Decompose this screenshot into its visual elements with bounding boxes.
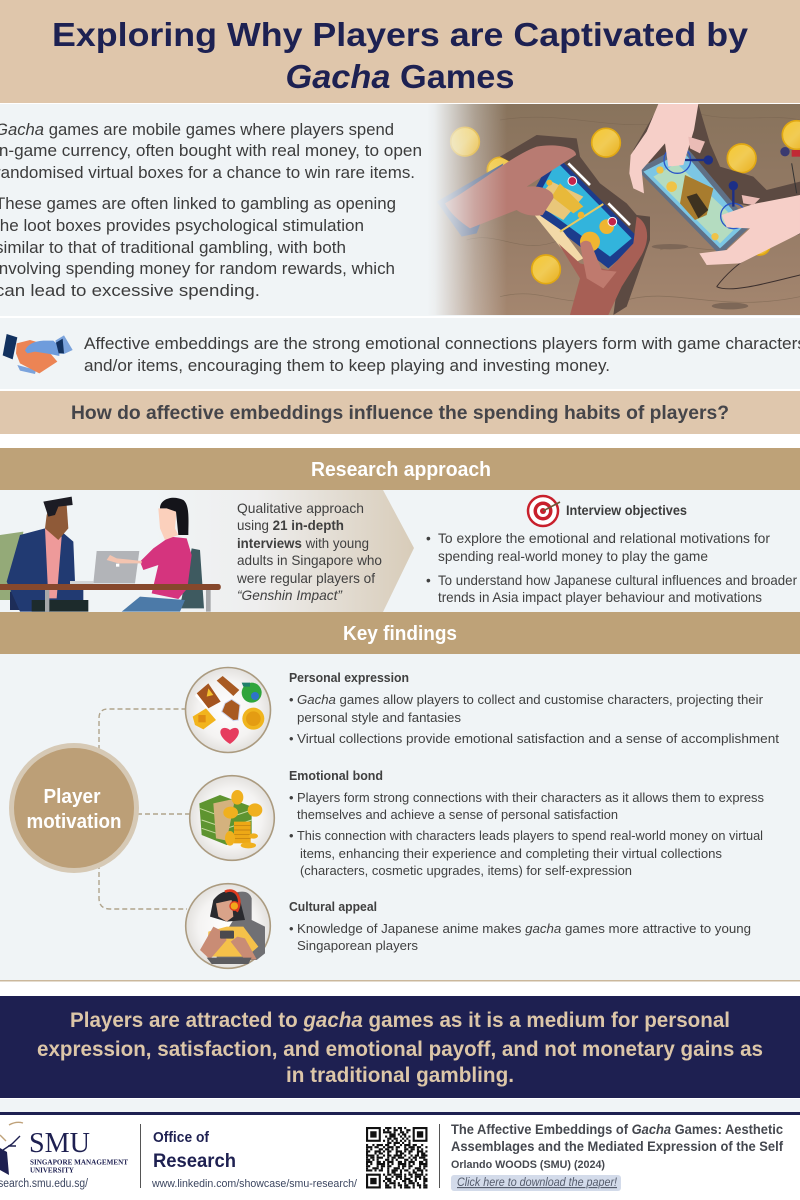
text block: definition: and/or items, encouraging them to keep playing and investing money. — [84, 356, 610, 375]
text block: what gacha games are — [0, 120, 422, 300]
text block: what gacha games are: the loot boxes provides psychological stimulation — [0, 216, 364, 235]
conclusion callout: expression, satisfaction, and emotional payoff, and not monetary gains as — [37, 1037, 763, 1061]
text block: emotional bond: • — [289, 790, 294, 805]
icon: collectibles — [186, 668, 270, 752]
conclusion callout — [0, 996, 800, 1098]
text block: what gacha games are: similar to that of traditional gambling, with both — [0, 238, 346, 257]
text block: objectives: To explore the emotional and relational motivations for — [438, 531, 770, 546]
left phone — [437, 163, 503, 237]
text block: emotional bond: Players form strong connections with their characters as it allows them to express — [297, 790, 764, 805]
text block: emotional bond: • — [289, 828, 294, 843]
player motivation circle — [9, 743, 139, 873]
text block: personal expression: Gacha games allow players to collect and customise characters, projecting their — [297, 692, 764, 707]
illustration: interview at a table — [0, 497, 221, 612]
heading: research approach: Research approach — [311, 459, 491, 481]
title: Exploring Why Players are Captivated by — [52, 17, 748, 54]
paper citation: Orlando WOODS (SMU) (2024) — [451, 1159, 605, 1171]
title — [0, 0, 800, 103]
panel: introduction — [0, 104, 800, 316]
arrow: approach callout — [150, 490, 414, 612]
text block: cultural appeal: Singaporean players — [297, 938, 418, 953]
text block: cultural appeal: • — [289, 921, 294, 936]
text block: qualitative approach: adults in Singapore who — [237, 553, 382, 568]
text block: what gacha games are: These games are often linked to gambling as opening — [0, 194, 396, 213]
text block: qualitative approach: were regular players of — [236, 571, 375, 586]
footer — [0, 1099, 800, 1191]
text block: objectives: trends in Asia impact player behaviour and motivations — [438, 590, 762, 605]
text block: objectives: To understand how Japanese cultural influences and broader — [438, 573, 797, 588]
shadows — [500, 135, 650, 315]
office of research — [153, 1130, 236, 1172]
paper citation — [451, 1122, 783, 1171]
text block: emotional bond: themselves and achieve a sense of personal satisfaction — [297, 807, 618, 822]
text block: qualitative approach: interviews with young — [237, 536, 369, 551]
text block: qualitative approach: “Genshin Impact” — [237, 588, 343, 603]
text block: personal expression: • — [289, 692, 294, 707]
office of research: Office of — [153, 1130, 209, 1146]
download button: Click here to download the paper! — [457, 1177, 618, 1189]
icon: gamer girl — [186, 884, 270, 968]
heading: key findings — [0, 612, 800, 654]
text block: personal expression: personal style and fantasies — [297, 710, 461, 725]
text block: cultural appeal — [289, 899, 751, 953]
heading: research question: How do affective embeddings influence the spending habits of players? — [71, 402, 729, 424]
text block: what gacha games are: can lead to excessive spending. — [0, 281, 260, 300]
panel: affective embeddings definition — [0, 318, 800, 389]
text block: emotional bond: Emotional bond — [289, 768, 383, 783]
SMU logo — [0, 1122, 128, 1175]
text block: what gacha games are: randomised virtual boxes for a chance to win rare items. — [0, 163, 415, 182]
text block: definition: Affective embeddings are the strong emotional connections players form with game characters — [84, 334, 800, 353]
text block: objectives: spending real-world money to play the game — [438, 549, 708, 564]
text block: emotional bond — [289, 768, 764, 878]
SMU logo: UNIVERSITY — [30, 1166, 75, 1174]
text block: emotional bond: items, enhancing their experience and completing their virtual collections — [300, 846, 722, 861]
heading: research question — [0, 391, 800, 434]
SMU logo: SINGAPORE MANAGEMENT — [30, 1158, 128, 1166]
text block: personal expression: • — [289, 731, 294, 746]
right phone — [637, 143, 752, 255]
paper citation: The Affective Embeddings of Gacha Games: Aesthetic — [451, 1122, 783, 1137]
icon: handshake — [3, 334, 73, 374]
text block: what gacha games are: Gacha games are mobile games where players spend — [0, 120, 394, 139]
office of research: Research — [153, 1151, 236, 1172]
text block: qualitative approach — [236, 501, 382, 603]
right hands — [629, 104, 698, 193]
coins — [451, 121, 800, 284]
connectors — [99, 709, 190, 909]
text block: emotional bond: (characters, cosmetic upgrades, items) for self-expression — [300, 863, 632, 878]
text block: cultural appeal: Knowledge of Japanese anime makes gacha games more attractive to young — [297, 921, 751, 936]
lower brown hand — [558, 217, 647, 315]
heading: interview objectives: Interview objectives — [566, 503, 687, 518]
title: Gacha Games — [286, 59, 514, 96]
QR code — [366, 1127, 427, 1188]
text block: personal expression: Virtual collections provide emotional satisfaction and a sense of accomplishment — [297, 731, 779, 746]
conclusion callout: Players are attracted to gacha games as it is a medium for personal — [70, 1008, 730, 1032]
text block: personal expression — [289, 670, 779, 746]
text block: emotional bond: This connection with characters leads players to spend real-world money on virtual — [297, 828, 763, 843]
text block: cultural appeal: Cultural appeal — [289, 899, 377, 914]
icon: target — [528, 496, 560, 526]
text block: qualitative approach: Qualitative approach — [237, 501, 364, 516]
heading: key findings: Key findings — [343, 623, 457, 645]
conclusion callout: in traditional gambling. — [286, 1063, 514, 1087]
text block: qualitative approach: using 21 in-depth — [237, 518, 344, 533]
text block: definition — [84, 334, 800, 375]
text block: what gacha games are: in-game currency, often bought with real money, to open — [0, 141, 422, 160]
player motivation circle: Player — [44, 786, 101, 808]
panel: research approach content — [0, 490, 800, 612]
left-top hand — [445, 145, 576, 228]
player motivation circle: motivation — [26, 811, 122, 833]
text block: objectives: • — [426, 573, 431, 588]
illustration: hands playing gacha games on phones — [427, 104, 800, 315]
text block: personal expression: Personal expression — [289, 670, 409, 685]
heading: research approach — [0, 448, 800, 490]
SMU logo: SMU — [29, 1128, 90, 1159]
panel: key findings — [0, 654, 800, 982]
text block: objectives: • — [426, 531, 431, 546]
paper citation: Assemblages and the Mediated Expression of the Self — [451, 1139, 783, 1154]
text block: what gacha games are: involving spending money for random rewards, which — [0, 259, 395, 278]
text block: objectives — [426, 531, 797, 605]
icon: money and coins — [190, 776, 274, 860]
linkedin url: www.linkedin.com/showcase/smu-research/ — [151, 1178, 358, 1190]
